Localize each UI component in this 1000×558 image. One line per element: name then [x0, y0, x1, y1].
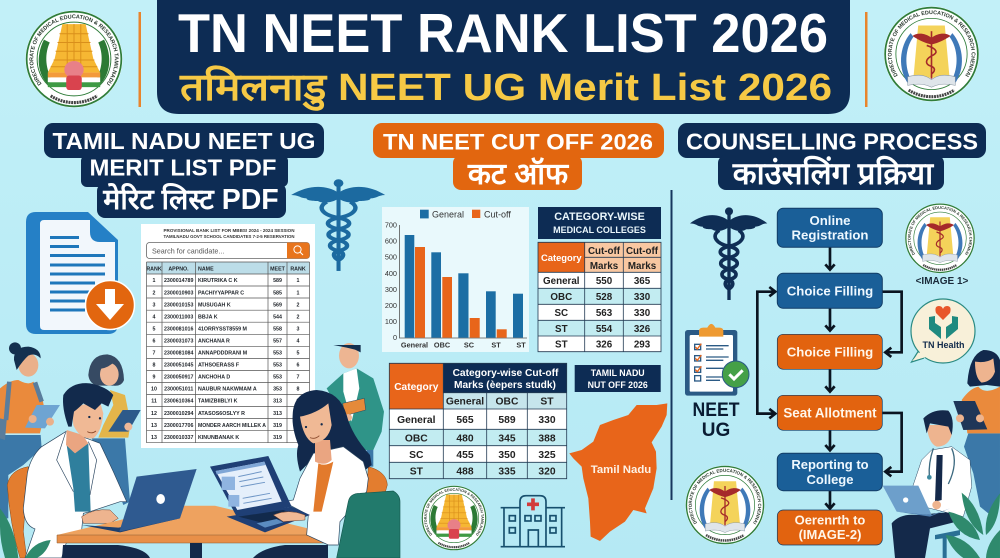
heading line 2: MERIT LIST PDF [90, 154, 276, 180]
table rows: MONDER AARCH MILLEK A [198, 423, 266, 429]
table rows: ANCHANA R [198, 338, 230, 344]
table rows: 2300050917 [164, 375, 193, 381]
map: Tamil Nadu: Tamil Nadu [591, 464, 651, 476]
y axis labels: 300 [385, 285, 397, 294]
title banner [157, 0, 850, 114]
hair [293, 390, 372, 472]
coat [283, 447, 368, 545]
step: reporting to college: Reporting to [791, 457, 869, 472]
search box [146, 242, 310, 258]
chart legend: General [432, 209, 464, 219]
table: category-wise cut-off marks: Category-wise Cut-off [453, 368, 559, 379]
table: medical colleges cut-off: Category [541, 252, 582, 263]
table: medical colleges cut-off: General [543, 276, 580, 287]
table rows: ANCHOHA D [198, 375, 230, 381]
y axis labels: 700 [385, 220, 397, 230]
table rows: 4 [297, 338, 300, 344]
text: NEET UG: UG [702, 420, 730, 441]
icon: PDF download document [26, 212, 134, 334]
table: medical colleges cut-off: 326 [596, 340, 613, 351]
icon: TN Health bubble [911, 299, 975, 363]
logo ring text: DIRECTORATE OF MEDICAL EDUCATION & RESEARCH TAMILNADU [424, 488, 484, 536]
flowchart [777, 208, 882, 545]
table: category-wise cut-off marks: General [397, 415, 436, 426]
girl with clipboard [953, 350, 1000, 513]
label: Tamil Nadu cut off: TAMIL NADU [591, 368, 645, 378]
panel: merit list table [141, 224, 315, 448]
table rows: 2300017706 [164, 423, 193, 429]
x axis labels [401, 341, 526, 350]
table rows: 1 [297, 290, 300, 296]
table rows: 2300081016 [164, 326, 193, 332]
table: category-wise cut-off marks: SC [409, 450, 424, 461]
table rows: 11 [151, 399, 157, 405]
table: medical colleges cut-off: ST [555, 324, 568, 335]
cut off line 1: TN NEET CUT OFF 2026 [383, 130, 653, 154]
table: category-wise cut-off marks: Marks (èepers studk) [454, 380, 556, 391]
counselling line 2: काउंसलिंग प्रक्रिया [732, 155, 934, 191]
table rows: 41ORRYSST8559 M [198, 326, 248, 332]
orange chair [7, 467, 28, 558]
logo: bottom medical emblem [686, 466, 764, 544]
table rows: TAMIZBIIBLYI K [198, 399, 238, 405]
Hindi subtitle: तमिलनाडु NEET UG Merit List 2026 [179, 65, 832, 111]
man in white coat [23, 383, 127, 558]
plant right [946, 493, 1000, 558]
icon: TN Health bubble: TN Health [922, 340, 965, 350]
table rows: 1 [153, 278, 156, 284]
step: reporting to college: College [807, 472, 853, 487]
table: category-wise cut-off marks [389, 363, 567, 479]
illustration: man in teal coat [327, 343, 384, 467]
x axis labels: SC [464, 341, 475, 350]
table: category-wise cut-off marks: ST [410, 466, 424, 478]
table: medical colleges cut-off: Marks [590, 261, 619, 272]
table [57, 506, 335, 558]
y axis labels [385, 220, 397, 342]
table rows [151, 278, 300, 441]
table rows: 2300011003 [164, 314, 193, 320]
y axis labels: 0 [393, 333, 397, 342]
icon: caduceus right [690, 207, 767, 300]
table rows: KIRUTRIKA C K [198, 278, 238, 284]
Cut-off series bars [415, 247, 507, 338]
logo: bottom temple emblem [422, 486, 486, 550]
table rows: 2300010903 [164, 290, 193, 296]
step: final: (IMAGE-2) [799, 527, 861, 542]
table rows: 2300014789 [164, 278, 193, 284]
table rows: 589 [273, 278, 282, 284]
chart legend: Cut-off [484, 209, 511, 219]
y axis labels: 600 [385, 237, 397, 246]
table header: NAME [198, 266, 214, 272]
table: medical colleges cut-off: Cut-off [588, 246, 621, 257]
step: final: Oerenrth to [795, 512, 865, 527]
heading line 1: TAMIL NADU NEET UG [52, 128, 316, 154]
table rows: 8 [153, 363, 156, 369]
table: medical colleges cut-off: 330 [634, 292, 651, 303]
table: medical colleges cut-off: ST [555, 340, 568, 351]
orange chair [367, 467, 387, 493]
table rows: ATHSOERASS F [198, 363, 240, 369]
table rows: 3 [153, 302, 156, 308]
table: category-wise cut-off marks: 350 [498, 450, 516, 461]
table rows: 2300610364 [164, 399, 193, 405]
heading: counselling [678, 123, 986, 191]
panel: category-wise medical colleges heading [538, 207, 661, 239]
laptop [210, 456, 310, 532]
General series bars [405, 235, 523, 338]
table rows: ATASOS6OSLYY R [198, 411, 245, 417]
table: category-wise cut-off marks: 335 [498, 466, 516, 478]
table: medical colleges cut-off: Cut-off [626, 246, 659, 257]
bar chart [382, 207, 529, 352]
y axis labels: 100 [385, 317, 397, 326]
logo ring text: DIRECTORATE OF MEDICAL EDUCATION & RESEARCH TAMILNADU [29, 14, 119, 86]
table rows: NAUBUR NAKWMAM A [198, 387, 257, 393]
x axis labels: OBC [434, 341, 451, 350]
table: category-wise cut-off marks: 488 [456, 466, 474, 478]
label: Tamil Nadu cut off: NUT OFF 2026 [588, 380, 648, 390]
table: medical colleges cut-off: 326 [634, 324, 651, 335]
icon: caduceus centre [291, 179, 385, 271]
table rows: 569 [273, 302, 282, 308]
illustration: girl and doctor right [883, 350, 1000, 558]
table rows: 353 [273, 387, 282, 393]
table rows: 13 [151, 435, 157, 441]
heading: cut off [373, 123, 664, 191]
search box: Search for candidate... [152, 246, 224, 256]
table: category-wise cut-off marks: ST [540, 396, 554, 408]
table rows: 585 [273, 290, 282, 296]
step: final [777, 510, 882, 545]
table rows: KINUNBANAK K [198, 435, 239, 441]
table: medical colleges cut-off: OBC [550, 292, 572, 303]
cut off line 2: कट ऑफ [467, 157, 570, 191]
step: seat allotment: Seat Allotment [783, 406, 877, 421]
step: choice filling orange: Choice Filling [787, 345, 873, 360]
table rows: 4 [153, 314, 156, 320]
table: medical colleges cut-off: SC [554, 308, 568, 319]
decorative column divider [670, 190, 672, 500]
illustration: students and male doctor left [0, 342, 141, 558]
table rows: 553 [273, 375, 282, 381]
table: medical colleges cut-off: 550 [596, 276, 613, 287]
table rows: 9 [153, 375, 156, 381]
table rows: 12 [151, 411, 157, 417]
student with yellow shirt [88, 354, 141, 505]
flowchart connectors [757, 247, 902, 509]
heading: merit list [44, 123, 324, 218]
table: category-wise cut-off marks: OBC [405, 434, 428, 444]
table rows: BBJA K [198, 314, 218, 320]
y axis labels: 200 [385, 301, 397, 310]
table rows: 313 [273, 399, 282, 405]
step: reporting to college [777, 453, 882, 491]
decorative header separators [138, 12, 868, 107]
map: Tamil Nadu [569, 403, 667, 541]
y axis labels: 500 [385, 253, 397, 262]
table: medical colleges cut-off: 554 [596, 324, 613, 335]
icon: hospital [501, 496, 565, 547]
table: medical colleges cut-off: 563 [596, 308, 613, 319]
text: NEET UG: NEET [692, 400, 740, 421]
step: choice filling orange [777, 334, 882, 369]
student with orange shirt [0, 342, 60, 518]
logo: top-right medical emblem [884, 6, 979, 102]
table: category-wise cut-off marks: Category [394, 382, 439, 393]
table rows: 1 [297, 278, 300, 284]
table rows: 2300010153 [164, 302, 193, 308]
step: seat allotment [777, 395, 882, 430]
doctor with laptop [883, 410, 972, 558]
step: online registration: Online [809, 213, 851, 228]
logo ring text: DIRECTORATE OF MEDICAL EDUCATION & RESEARCH CHENNAI [908, 206, 972, 256]
text: NEET UG [692, 400, 740, 441]
table rows: PACHIYYAPPAR C [198, 290, 244, 296]
table rows: 7 [297, 375, 300, 381]
table rows: ANNAPDDDRANI M [198, 350, 248, 356]
x axis labels: General [401, 341, 428, 350]
step: choice filling blue: Choice Filling [787, 284, 873, 299]
table rows: 557 [273, 338, 282, 344]
step: online registration [777, 208, 882, 247]
step: online registration: Registration [792, 228, 868, 242]
table: category-wise cut-off marks: 325 [538, 450, 556, 461]
label: Tamil Nadu cut off [575, 365, 661, 392]
table: medical colleges cut-off: Marks [628, 261, 657, 272]
table rows: 2 [153, 290, 156, 296]
table rows: 5 [153, 326, 156, 332]
table rows: 553 [273, 350, 282, 356]
table rows: 8 [297, 387, 300, 393]
table: category-wise cut-off marks: 388 [538, 434, 556, 444]
table: category-wise cut-off marks: 345 [498, 434, 516, 444]
icon: checklist clipboard [685, 324, 749, 396]
step: choice filling blue [777, 273, 882, 308]
table rows: 9 [297, 399, 300, 405]
counselling line 1: COUNSELLING PROCESS [686, 128, 978, 154]
table: medical colleges cut-off: 365 [634, 276, 651, 287]
x axis labels: ST [491, 341, 501, 350]
table: medical colleges cut-off: 330 [634, 308, 651, 319]
table rows: 2 [297, 314, 300, 320]
table rows: 319 [273, 423, 282, 429]
logo: top-left temple emblem [26, 10, 122, 108]
illustration: man's laptop [82, 469, 197, 532]
list subtitle: TAMILNADU GOVT SCHOOL CANDIDATES 7-2-5 RESERVATION [164, 234, 295, 240]
y axis labels: 400 [385, 269, 397, 278]
table rows: 553 [273, 363, 282, 369]
table rows: 319 [273, 435, 282, 441]
table: medical colleges cut-off [538, 242, 661, 352]
table: category-wise cut-off marks: 330 [538, 415, 556, 426]
table rows: 2300051045 [164, 363, 193, 369]
table: category-wise cut-off marks: General [446, 396, 484, 408]
plant left [0, 508, 51, 558]
table: medical colleges cut-off: 293 [634, 340, 651, 351]
table: category-wise cut-off marks: 320 [538, 466, 556, 478]
table rows: 2300051011 [164, 387, 193, 393]
table: category-wise cut-off marks: 455 [456, 450, 474, 461]
table rows: 2 [297, 302, 300, 308]
table header [146, 262, 310, 274]
logo ring text: DIRECTORATE OF MEDICAL EDUCATION & RESEARCH CHENNAI [888, 10, 976, 78]
list title: PROVISIONAL BANK LIST FOR MBBS! 2024 - 2024 SESSION [164, 228, 295, 234]
table rows: 2300010294 [164, 411, 193, 417]
table header: MEET [270, 266, 286, 272]
table rows: 558 [273, 326, 282, 332]
table: medical colleges cut-off: 528 [596, 292, 613, 303]
table header: APPNO. [168, 266, 189, 272]
green chair [337, 491, 400, 558]
chart legend [420, 209, 511, 219]
heading line 3: मेरिट लिस्ट PDF [102, 182, 279, 216]
illustration: woman in white coat with laptop [210, 390, 400, 558]
table rows: 10 [151, 387, 157, 393]
table rows: 2300010337 [164, 435, 193, 441]
table rows: 13 [151, 423, 157, 429]
table rows: 5 [297, 350, 300, 356]
table rows: 2300031073 [164, 338, 193, 344]
x axis labels: ST [516, 341, 526, 350]
table rows: 6 [153, 338, 156, 344]
table: category-wise cut-off marks: 565 [456, 415, 474, 426]
table rows: 3 [297, 326, 300, 332]
table header: RANK [290, 266, 306, 272]
table rows: 6 [297, 363, 300, 369]
table: category-wise cut-off marks: 480 [456, 434, 474, 444]
table header: RANK [146, 266, 162, 272]
table: category-wise cut-off marks: 589 [498, 415, 516, 426]
table rows: 544 [273, 314, 282, 320]
table rows: 7 [153, 350, 156, 356]
table rows: 313 [273, 411, 282, 417]
table rows: MUSUGAH K [198, 302, 231, 308]
logo ring text: DIRECTORATE OF MEDICAL EDUCATION & RESEARCH CHENNAI [688, 468, 762, 524]
table rows: 2300081084 [164, 350, 193, 356]
panel: category-wise medical colleges heading: MEDICAL COLLEGES [553, 225, 646, 235]
logo: right medical emblem [905, 203, 975, 274]
caption: image 1: <IMAGE 1> [916, 276, 969, 287]
table: category-wise cut-off marks: OBC [496, 396, 519, 408]
panel: category-wise medical colleges heading: CATEGORY-WISE [554, 211, 645, 223]
main title: TN NEET RANK LIST 2026 [178, 2, 828, 64]
